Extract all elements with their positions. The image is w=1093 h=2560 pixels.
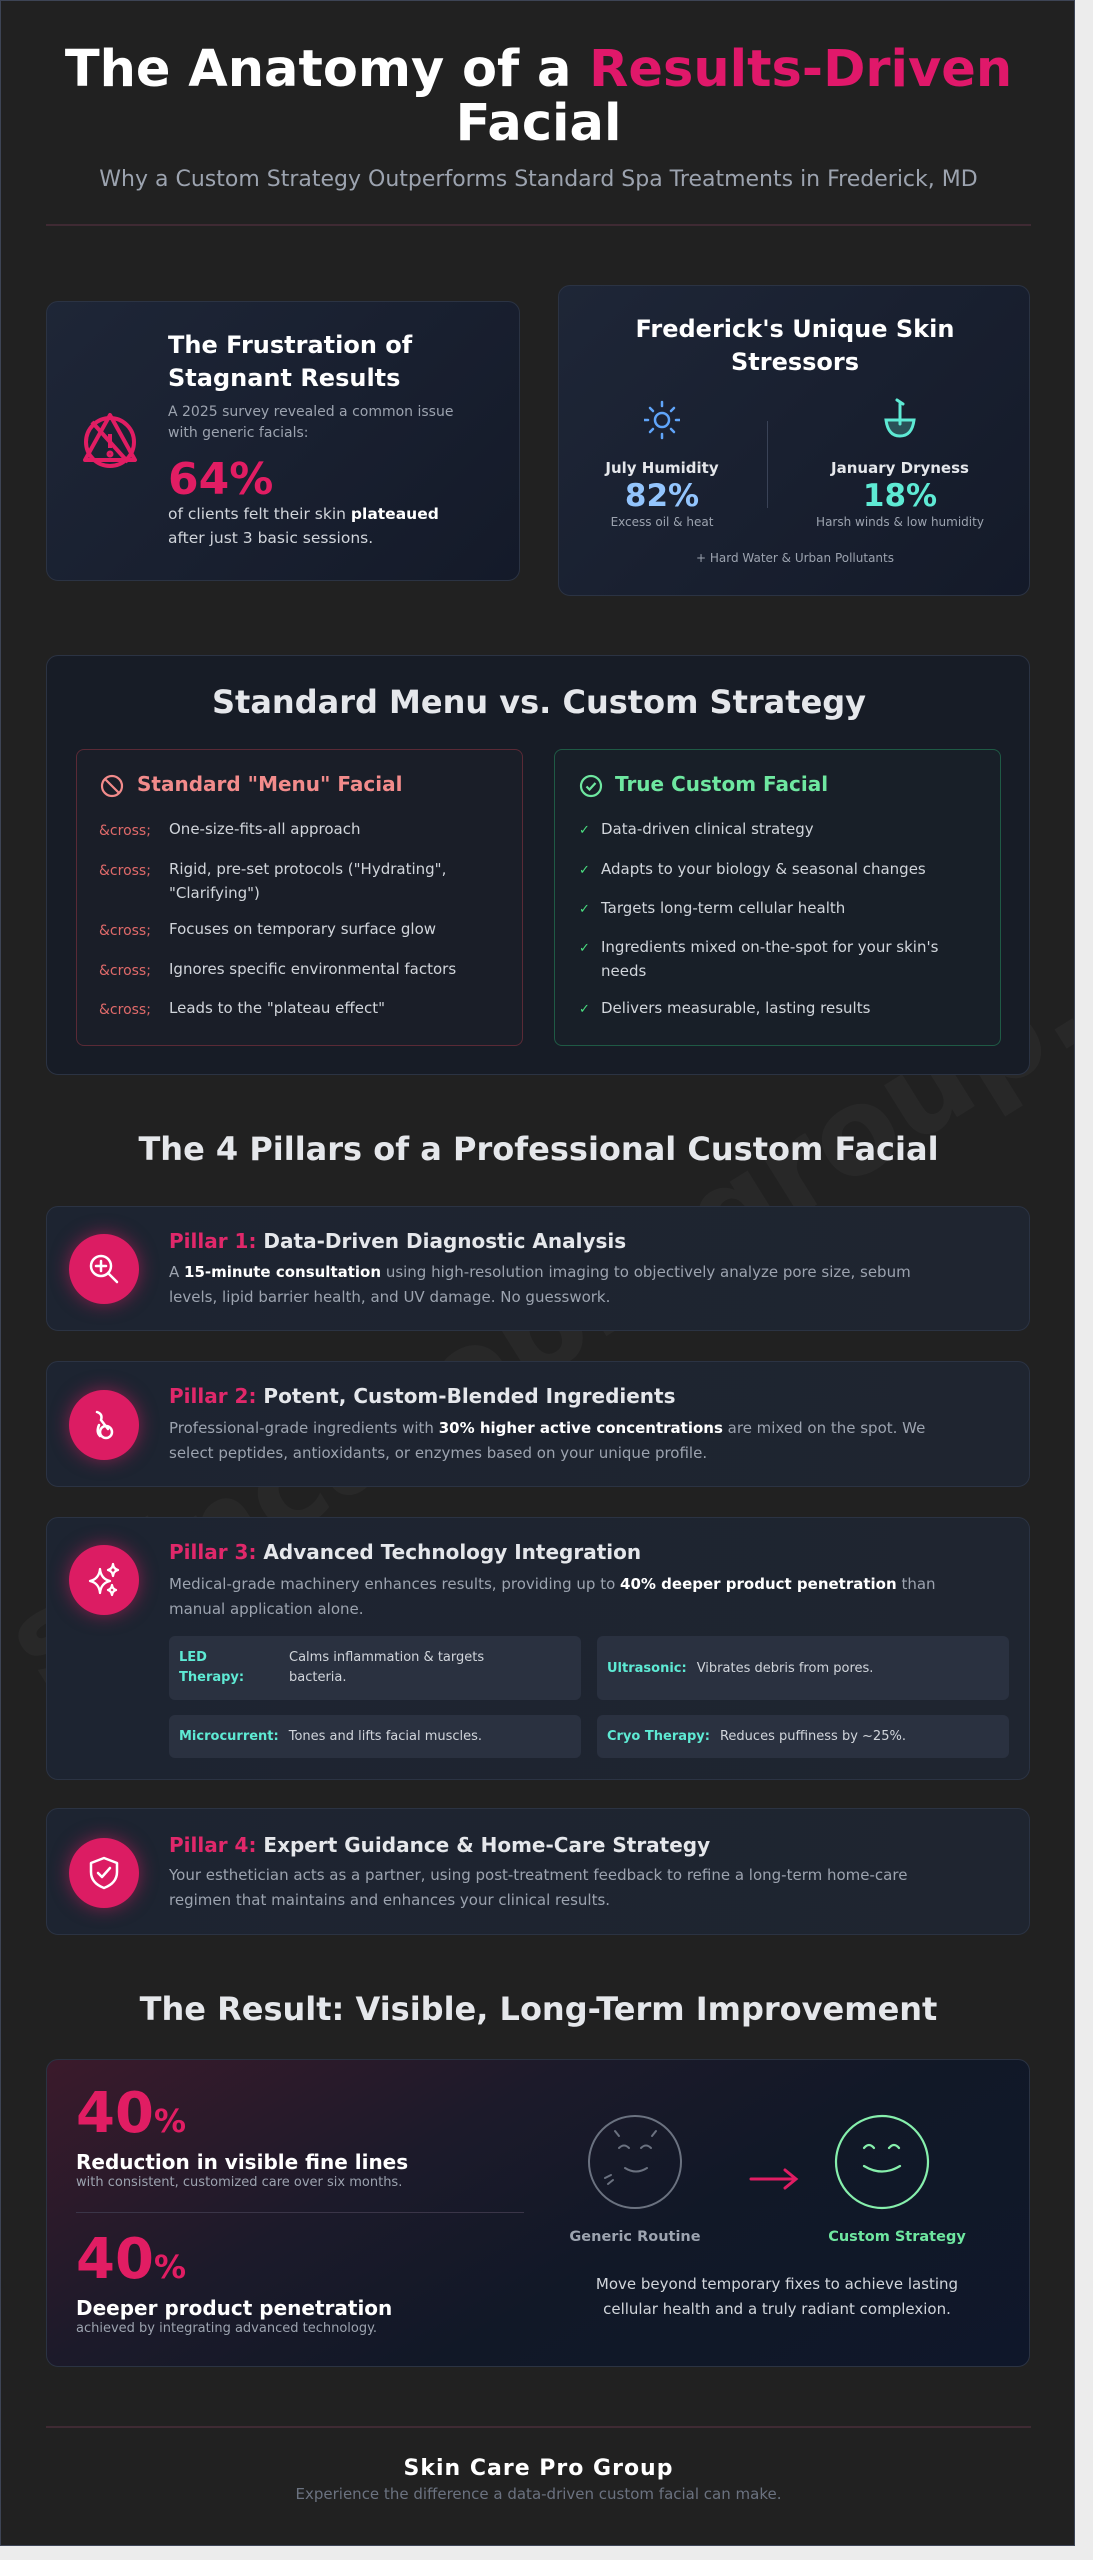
pillar 1: A 15-minute consultation using high-resolution imaging to objectively analyze pore size, sebum levels, lipid barrier health, and UV damage. No guesswork. xyxy=(169,1263,911,1306)
heading: Frederick's Unique Skin xyxy=(636,315,954,343)
tech: LED: LED xyxy=(179,1650,207,1665)
pillar 1 xyxy=(46,1206,1030,1331)
stat: july: July Humidity xyxy=(605,459,719,477)
heading xyxy=(168,331,412,392)
box: custom: Data-driven clinical strategy xyxy=(601,820,814,838)
box: standard xyxy=(76,749,523,1046)
faces illustration xyxy=(588,2114,930,2210)
label: custom: Custom Strategy xyxy=(828,2229,966,2245)
icon: mixing xyxy=(69,1390,139,1460)
heading xyxy=(636,315,954,376)
stat 2: Deeper product penetration xyxy=(76,2296,392,2320)
panel: frustration xyxy=(46,301,520,581)
tech: cryo: Cryo Therapy: xyxy=(607,1729,710,1744)
tech: ultrasonic: Ultrasonic: xyxy=(607,1660,687,1676)
tech: LED xyxy=(169,1636,581,1700)
stat 2: 40% xyxy=(76,2227,186,2292)
icon: shield xyxy=(69,1838,139,1908)
box: standard: One-size-fits-all approach xyxy=(169,820,360,838)
icon: sun xyxy=(644,400,680,440)
footer: Skin Care Pro Group xyxy=(404,2456,673,2481)
icon: magnifier xyxy=(69,1234,139,1304)
box: standard: Standard "Menu" Facial xyxy=(137,772,402,796)
pillar 4: Pillar 4: Expert Guidance & Home-Care Strategy xyxy=(169,1833,710,1857)
box: custom: ✓ xyxy=(579,823,590,838)
label: generic: Generic Routine xyxy=(569,2229,701,2245)
box: custom: Ingredients mixed on-the-spot for your skin's needs xyxy=(601,938,938,980)
tech: LED: Calms inflammation & targets bacteria. xyxy=(289,1650,484,1685)
tech: ultrasonic xyxy=(597,1636,1009,1700)
tech: LED: Therapy: xyxy=(179,1670,244,1685)
heading: Stagnant Results xyxy=(168,364,400,392)
box: custom: Delivers measurable, lasting results xyxy=(601,999,870,1017)
panel: stressors xyxy=(558,285,1030,596)
pillar 1: Pillar 1: Data-Driven Diagnostic Analysis xyxy=(169,1229,626,1253)
icon: sparkles xyxy=(69,1545,139,1615)
box: custom: ✓ xyxy=(579,941,590,956)
tech: ultrasonic: Vibrates debris from pores. xyxy=(697,1660,873,1676)
pillar 4: Your esthetician acts as a partner, using post-treatment feedback to refine a long-term home-care regimen that maintains and enhances your clinical results. xyxy=(169,1866,907,1909)
stat 2 xyxy=(76,2227,392,2336)
pillar 3: Medical-grade machinery enhances results, providing up to 40% deeper product penetration than manual application alone. xyxy=(169,1575,936,1618)
tech: microcurrent: Microcurrent: xyxy=(179,1729,279,1744)
text: A 2025 survey revealed a common issue with generic facials: xyxy=(168,404,453,441)
stat 64%: 64% xyxy=(168,454,273,505)
box: standard: Ignores specific environmental factors xyxy=(169,960,456,978)
icon: dry xyxy=(884,398,916,438)
heading: result: The Result: Visible, Long-Term Improvement xyxy=(140,1990,937,2028)
panel: result xyxy=(46,2059,1030,2367)
pillar 4 xyxy=(46,1808,1030,1935)
stat: january xyxy=(816,459,984,529)
pillar 2: Pillar 2: Potent, Custom-Blended Ingredients xyxy=(169,1384,676,1408)
box: standard: Rigid, pre-set protocols ("Hydrating", "Clarifying") xyxy=(169,860,446,902)
box: standard: Leads to the "plateau effect" xyxy=(169,999,385,1017)
stat 1: with consistent, customized care over six months. xyxy=(76,2175,402,2190)
box: custom: ✓ xyxy=(579,863,590,878)
box: custom: Adapts to your biology & seasonal changes xyxy=(601,860,926,878)
heading: pillars: The 4 Pillars of a Professional Custom Facial xyxy=(138,1130,939,1168)
stat: july: Excess oil & heat xyxy=(611,515,713,529)
box: custom: True Custom Facial xyxy=(615,772,828,796)
pillar 2 xyxy=(46,1361,1030,1487)
heading: Stressors xyxy=(731,348,859,376)
icon: warning xyxy=(83,412,138,468)
tech: cryo xyxy=(597,1715,1009,1758)
tech: microcurrent: Tones and lifts facial muscles. xyxy=(289,1729,482,1744)
tech: cryo: Reduces puffiness by ~25%. xyxy=(720,1729,906,1744)
box: standard: &cross; xyxy=(99,923,151,939)
box: custom: ✓ xyxy=(579,1002,590,1017)
stat: july: 82% xyxy=(625,478,699,514)
heading: The Frustration of xyxy=(168,331,412,359)
footer xyxy=(296,2456,781,2503)
box: standard: &cross; xyxy=(99,823,151,839)
panel: frustration: of clients felt their skin plateaued after just 3 basic sessions. xyxy=(168,505,439,547)
title: The Anatomy of a Results-Driven xyxy=(65,40,1012,99)
subtitle: Why a Custom Strategy Outperforms Standard Spa Treatments in Frederick, MD xyxy=(99,167,978,192)
box: standard: Focuses on temporary surface glow xyxy=(169,920,436,938)
pillar 3 xyxy=(46,1517,1030,1780)
stat: january: January Dryness xyxy=(831,459,969,477)
title xyxy=(65,40,1012,153)
panel: comparison xyxy=(46,655,1030,1075)
pillar 2: Professional-grade ingredients with 30% higher active concentrations are mixed on the spot. We select peptides, antioxidants, or enzymes based on your unique profile. xyxy=(169,1419,925,1462)
title: Facial xyxy=(456,94,621,153)
heading: Standard Menu vs. Custom Strategy xyxy=(212,683,866,721)
stat 1: 40% xyxy=(76,2081,186,2146)
footer: Experience the difference a data-driven custom facial can make. xyxy=(296,2485,781,2503)
box: custom: ✓ xyxy=(579,902,590,917)
stat: january: 18% xyxy=(863,478,937,514)
stat 2: achieved by integrating advanced technology. xyxy=(76,2321,377,2336)
pillar 3: Pillar 3: Advanced Technology Integration xyxy=(169,1540,641,1564)
box: standard: &cross; xyxy=(99,863,151,879)
stat 1 xyxy=(76,2081,408,2190)
stat: july xyxy=(604,459,719,529)
tech: microcurrent xyxy=(169,1715,581,1758)
box: custom xyxy=(554,749,1001,1046)
box: standard: &cross; xyxy=(99,963,151,979)
stat: january: Harsh winds & low humidity xyxy=(816,515,984,529)
panel: stressors: + Hard Water & Urban Pollutants xyxy=(696,551,894,565)
caption: Move beyond temporary fixes to achieve lasting cellular health and a truly radiant complexion. xyxy=(596,2275,958,2318)
box: custom: Targets long-term cellular health xyxy=(601,899,845,917)
stat 1: Reduction in visible fine lines xyxy=(76,2150,408,2174)
box: standard: &cross; xyxy=(99,1002,151,1018)
